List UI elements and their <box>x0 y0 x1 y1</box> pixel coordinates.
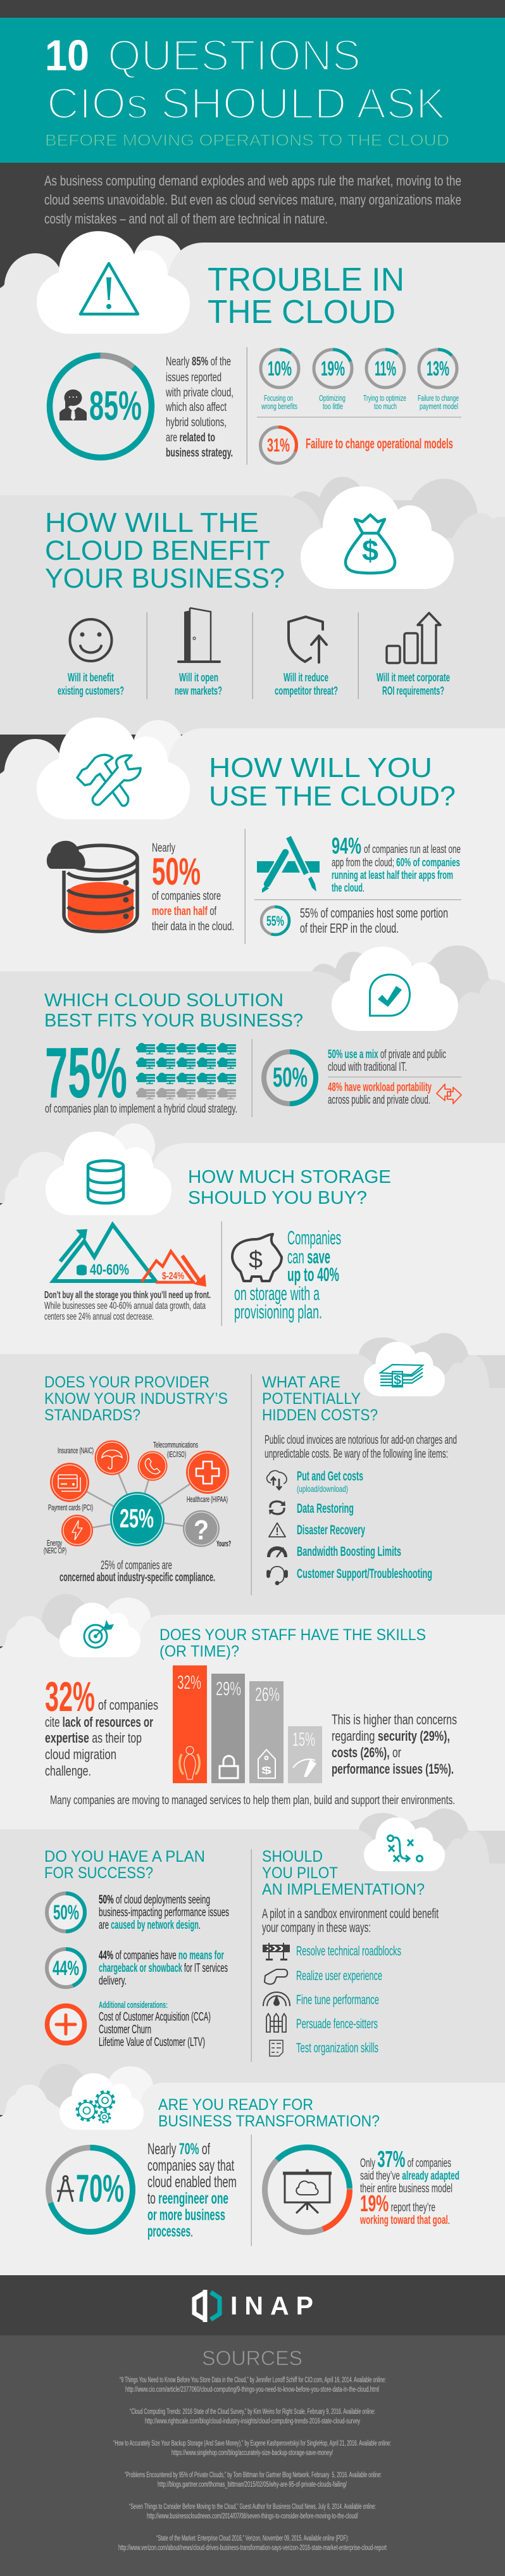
heading: sources: SOURCES <box>202 2347 302 2370</box>
heading: provider standards: KNOW YOUR INDUSTRY’S <box>44 1390 228 1408</box>
small donuts row: Optimizing <box>319 393 346 403</box>
donut: 85% <box>49 356 152 457</box>
text: reengineer processes: to reengineer one <box>147 2190 228 2207</box>
text: reengineer processes: cloud enabled them <box>147 2173 237 2191</box>
donut: 55% ERP: 55% <box>266 913 284 929</box>
icon: price tag <box>258 1750 275 1778</box>
heading: THE CLOUD <box>208 294 396 331</box>
title line one: 10 <box>45 31 89 80</box>
icon: price tag: $ <box>261 1765 271 1776</box>
icon: portability arrows <box>437 1084 461 1104</box>
icon: piggy bank <box>232 1234 282 1281</box>
text: mix and portability <box>328 1048 461 1107</box>
donut: 31% failure: 31% <box>267 435 290 456</box>
small donuts row: 19% <box>321 357 345 380</box>
small donuts row: Focusing on <box>264 393 293 403</box>
text: 85% explanation: which also affect <box>165 401 227 414</box>
icon: restore arrows <box>269 1501 285 1515</box>
text: network design: are caused by network design. <box>99 1919 201 1932</box>
white cloud with tools icon <box>37 717 190 819</box>
heading: BUSINESS TRANSFORMATION? <box>158 2112 380 2130</box>
text: 94% stat: 94% <box>332 833 361 859</box>
text: other concerns: This is higher than concerns <box>332 1712 457 1727</box>
text: bandwidth boosting limits: Bandwidth Boosting Limits <box>297 1544 401 1559</box>
heading: DOES YOUR STAFF HAVE THE SKILLS <box>159 1626 426 1644</box>
heading <box>159 1626 426 1660</box>
text: mix and portability: 48% have workload portability <box>328 1081 432 1094</box>
panel: plan and pilot <box>0 1809 505 2115</box>
donut: 50% mix: 50% <box>273 1062 308 1093</box>
heading: pilot implementation <box>262 1848 425 1898</box>
hub labels: Healthcare (HIPAA) <box>187 1495 228 1504</box>
text: 50% stat <box>152 842 234 933</box>
heading: hidden costs: HIDDEN COSTS? <box>262 1406 378 1424</box>
text: other concerns <box>332 1712 457 1777</box>
text: persuade fence-sitters: Persuade fence-sitters <box>296 2017 378 2031</box>
bar chart: migration concerns: 29% <box>216 1677 241 1700</box>
hub labels: Yours? <box>216 1539 231 1548</box>
text: invoice intro <box>265 1434 457 1461</box>
panel: title banner <box>0 18 505 163</box>
question labels: competitor threat? <box>275 685 338 697</box>
white cloud with money bag icon <box>301 486 454 589</box>
panel: business transformation <box>0 2064 505 2275</box>
heading: YOUR BUSINESS? <box>45 563 285 594</box>
bar chart: migration concerns: 32% <box>177 1671 201 1693</box>
text: network design <box>99 1893 229 1932</box>
text: pilot intro: your company in these ways: <box>262 1921 371 1935</box>
icon: growth bars and arrow <box>387 613 440 663</box>
donut: 70% reengineer <box>48 2148 133 2232</box>
heading: BEST FITS YOUR BUSINESS? <box>44 1011 303 1031</box>
bar chart: migration concerns <box>173 1665 322 1783</box>
small donuts row: 10% <box>268 357 292 380</box>
list: pilot benefits <box>263 1943 401 2056</box>
donut: 55% ERP: of their ERP in the cloud. <box>300 921 399 936</box>
white cloud with check icon <box>332 947 458 1031</box>
icon: energy bolt <box>61 1515 93 1546</box>
text: 85% explanation: with private cloud, <box>165 386 234 400</box>
hub labels: Telecommunications <box>153 1441 198 1449</box>
panel: sources <box>0 2335 505 2576</box>
hub: 25%: 25% <box>120 1503 154 1533</box>
heading: provider standards <box>44 1373 228 1424</box>
icon: smiley <box>70 619 111 661</box>
diagram: industry compliance hub <box>44 1440 231 1555</box>
question labels: existing customers? <box>58 685 124 697</box>
hub: 25% <box>110 1492 165 1546</box>
text: storage advice: While businesses see 40-60% annual data growth, data <box>44 1301 206 1311</box>
source list: “State of the Market: Enterprise Cloud 2016,” Verizon, November 09, 2015. Available online (PDF): <box>156 2535 349 2542</box>
text: 32% lack of resources: expertise as their top <box>45 1730 142 1746</box>
text: adaptation stats: Only 37% of companies <box>360 2146 451 2172</box>
panel: provider standards and hidden costs <box>0 1333 505 1646</box>
heading <box>158 2096 380 2130</box>
icon: upload and download cloud <box>267 1470 287 1489</box>
text: 32% lack of resources <box>45 1673 158 1779</box>
icon: person <box>180 1746 199 1779</box>
heading: CLOUD BENEFIT <box>45 535 270 566</box>
text: 85% explanation: business strategy. <box>166 446 233 460</box>
text: 32% lack of resources: of companies <box>98 1697 158 1713</box>
text: 85% explanation: issues reported <box>166 371 221 384</box>
donut: 50% network design <box>47 1893 85 1931</box>
icon: padlock <box>220 1756 238 1778</box>
chart: growth and cost mountains: 40-60% <box>90 1261 129 1279</box>
icon: checklist <box>270 2040 283 2056</box>
text: 32% lack of resources: cloud migration <box>45 1746 116 1762</box>
text: other concerns: costs (26%), or <box>332 1745 401 1760</box>
heading: pilot implementation: AN IMPLEMENTATION? <box>262 1881 425 1898</box>
white cloud with gears icon <box>59 2073 144 2130</box>
heading: hidden costs: WHAT ARE <box>262 1373 340 1391</box>
text: adaptation stats: their entire business model <box>360 2182 452 2195</box>
text: reengineer processes <box>147 2140 237 2240</box>
text: 50% stat: of companies store <box>152 890 221 903</box>
donut: 44% chargeback <box>47 1949 85 1987</box>
text: additional considerations <box>99 2000 211 2049</box>
icon: fence <box>266 2014 286 2032</box>
white cloud with money bag icon: $ <box>362 534 378 567</box>
heading: provider standards: DOES YOUR PROVIDER <box>44 1373 209 1391</box>
text: chargeback: delivery. <box>99 1974 127 1988</box>
heading <box>209 752 456 812</box>
icon: tuning gauge <box>263 1992 290 2006</box>
icon: roadblock <box>263 1943 290 1960</box>
text: 85% explanation: are related to <box>166 431 215 445</box>
icon: question <box>183 1510 220 1547</box>
source list <box>113 2377 391 2552</box>
text: reengineer processes: or more business <box>147 2206 225 2224</box>
text: test organization skills: Test organization skills <box>296 2041 378 2055</box>
heading: SHOULD YOU BUY? <box>188 1188 367 1208</box>
text: 50% stat: 50% <box>152 850 201 893</box>
title line one: QUESTIONS <box>108 31 361 80</box>
hub labels: (NERC CIP) <box>44 1546 66 1555</box>
hub labels: Payment cards (PCI) <box>48 1503 93 1512</box>
text: 50% stat: more than half of <box>152 905 216 918</box>
white cloud with money icon <box>364 1342 445 1396</box>
heading <box>45 507 285 594</box>
chart: growth and cost mountains <box>53 1225 206 1287</box>
heading: hidden costs <box>262 1373 378 1424</box>
text: reengineer processes: processes. <box>147 2223 193 2240</box>
panel: how much storage <box>0 1123 505 1393</box>
heading: WHICH CLOUD SOLUTION <box>44 990 284 1011</box>
text: 32% lack of resources: challenge. <box>45 1763 91 1779</box>
icon: bandwidth gauge <box>267 1546 287 1557</box>
small donuts row: 13% <box>427 357 449 380</box>
text: mix and portability: across public and private cloud. <box>328 1094 430 1107</box>
question labels: new markets? <box>175 685 222 697</box>
white cloud with target icon <box>59 1603 140 1657</box>
bar chart: migration concerns: 15% <box>292 1728 315 1750</box>
small donuts row: too much <box>374 401 397 411</box>
text: network design: business-impacting performance issues <box>99 1906 229 1919</box>
white cloud with money icon: $ <box>394 1373 401 1387</box>
icon grid: cloud servers <box>136 1043 236 1099</box>
question labels: ROI requirements? <box>382 685 444 697</box>
icon: door <box>177 608 221 663</box>
text: 85% explanation: hybrid solutions, <box>166 416 227 429</box>
small donuts row <box>261 350 459 411</box>
text: storage advice: Don’t buy all the storage you think you’ll need up front. <box>44 1290 211 1301</box>
text: mix and portability: 50% use a mix of private and public <box>328 1048 446 1061</box>
heading: HOW WILL THE <box>45 507 259 538</box>
text: 32% lack of resources: 32% <box>45 1673 95 1720</box>
icon: insurance umbrella <box>95 1440 129 1475</box>
donut: 31% failure <box>261 427 453 464</box>
footer: INAP logo: INAP <box>230 2291 313 2320</box>
question labels: Will it meet corporate <box>377 671 450 684</box>
subtitle: BEFORE MOVING OPERATIONS TO THE CLOUD <box>45 132 449 149</box>
text: compliance caption <box>59 1559 215 1584</box>
donut: 55% ERP <box>261 906 448 936</box>
donut: 44% chargeback: 44% <box>53 1957 79 1979</box>
heading: plan for success: DO YOU HAVE A PLAN <box>44 1848 205 1866</box>
icon: payment card <box>50 1463 89 1502</box>
text: 85% explanation <box>165 355 234 460</box>
small donuts row: payment model <box>420 401 458 411</box>
text: mix and portability: cloud with traditional IT. <box>328 1061 407 1074</box>
text: adaptation stats: 19% report they’re <box>360 2190 435 2216</box>
list: hidden cost items <box>267 1469 432 1584</box>
text: fine tune performance: Fine tune performance <box>296 1993 379 2007</box>
heading: HOW WILL YOU <box>209 752 432 783</box>
text: put and get costs: Put and Get costs <box>297 1469 363 1484</box>
icon: presentation board <box>283 2169 332 2213</box>
heading: hidden costs: POTENTIALLY <box>262 1390 361 1408</box>
icon: headset <box>267 1567 287 1584</box>
icon: pointing hand <box>265 1969 287 1984</box>
text: other concerns: regarding security (29%), <box>332 1728 450 1744</box>
heading: USE THE CLOUD? <box>209 781 456 812</box>
text: 94% stat: app from the cloud; 60% of companies <box>332 856 460 869</box>
text: reengineer processes: companies say that <box>147 2157 234 2175</box>
source list: http://blogs.gartner.com/thomas_bittman/2015/02/05/why-are-95-of-private-clouds-failing/ <box>158 2481 347 2489</box>
text: savings callout: up to 40% <box>287 1263 339 1285</box>
text: compliance caption: concerned about industry-specific compliance. <box>59 1571 215 1584</box>
text: additional considerations: Lifetime Value of Customer (LTV) <box>99 2036 205 2049</box>
icon: app store <box>257 837 320 893</box>
text: savings callout: provisioning plan. <box>234 1301 322 1323</box>
icon: businessman <box>59 389 87 420</box>
text: savings callout <box>234 1227 341 1323</box>
small donuts row: wrong benefits <box>261 401 297 411</box>
icon: piggy bank: $ <box>249 1247 263 1273</box>
donut: 70% reengineer: 70% <box>76 2167 124 2210</box>
text: 50% stat: their data in the cloud. <box>152 920 234 933</box>
text: additional considerations: Customer Churn <box>99 2023 151 2036</box>
donut: 37% and 19% adapted <box>247 2130 367 2250</box>
donut: 50% network design: 50% <box>53 1901 79 1924</box>
text: 94% stat <box>332 833 461 894</box>
text: chargeback <box>99 1949 228 1988</box>
icon: database with cloud <box>47 841 137 931</box>
source list: http://www.rightscale.com/blog/cloud-industry-insights/cloud-computing-trends-2016-state-cloud-survey <box>145 2418 360 2425</box>
text: savings callout: on storage with a <box>234 1282 320 1304</box>
text: compliance caption: 25% of companies are <box>101 1559 172 1572</box>
panel: which cloud solution <box>0 945 505 1203</box>
hub labels <box>44 1441 231 1555</box>
bar chart: migration concerns: 26% <box>255 1683 280 1705</box>
text: 32% lack of resources: cite lack of resources or <box>45 1714 153 1730</box>
text: storage advice <box>44 1290 211 1322</box>
icon: healthcare cross <box>186 1451 229 1494</box>
white cloud with database icon <box>46 1132 171 1215</box>
hub labels: Energy <box>47 1539 62 1548</box>
text: pilot intro <box>262 1907 439 1935</box>
panel: trouble in the cloud <box>0 231 505 570</box>
heading: provider standards: STANDARDS? <box>44 1406 140 1424</box>
footer: INAP logo <box>0 2275 505 2335</box>
heading: HOW MUCH STORAGE <box>188 1167 391 1187</box>
donut: 50% mix <box>264 1052 316 1104</box>
text: hybrid strategy: of companies plan to implement a hybrid cloud strategy. <box>45 1102 237 1116</box>
text: put and get costs <box>297 1469 363 1494</box>
stat: 75%: 75% <box>45 1033 127 1113</box>
heading: pilot implementation: SHOULD <box>262 1848 323 1866</box>
heading <box>208 262 404 331</box>
intro text <box>44 173 461 227</box>
text: realize user experience: Realize user experience <box>296 1969 382 1983</box>
hub labels: (IEC/ISO) <box>167 1450 186 1459</box>
text: 94% stat: the cloud. <box>332 881 365 894</box>
icon: warning <box>269 1523 285 1537</box>
panel: how will the cloud benefit <box>0 477 505 735</box>
chart: growth and cost mountains: $-24% <box>162 1271 184 1282</box>
text: other concerns: performance issues (15%). <box>332 1761 454 1777</box>
white cloud with warning icon <box>37 231 190 334</box>
text: chargeback: 44% of companies have no means for <box>99 1949 224 1962</box>
text: savings callout: Companies <box>287 1227 341 1249</box>
heading <box>44 990 303 1031</box>
question labels: Will it benefit <box>68 671 114 684</box>
small donuts row: too little <box>323 401 343 411</box>
heading: (OR TIME)? <box>159 1643 239 1660</box>
heading: plan for success <box>44 1848 205 1882</box>
heading: TROUBLE IN <box>208 262 404 298</box>
icon: gauge <box>293 1759 316 1777</box>
heading: ARE YOU READY FOR <box>158 2096 313 2114</box>
title line two: CIOs SHOULD ASK <box>47 79 446 128</box>
heading: plan for success: FOR SUCCESS? <box>44 1864 153 1882</box>
small donuts row: 11% <box>375 357 396 380</box>
source list: http://www.cio.com/article/2377060/cloud-computing/9-things-you-need-to-know-before-you-store-data-in-the-cloud.html <box>125 2386 379 2394</box>
source list: https://www.singlehop.com/blog/accurately-size-backup-storage-save-money/ <box>171 2449 334 2457</box>
icon: telecom phone <box>138 1451 167 1481</box>
source list: http://www.businesscloudnews.com/2014/07/08/seven-things-to-consider-before-moving-to-the-cloud/ <box>147 2513 359 2520</box>
text: 85% explanation: Nearly 85% of the <box>166 355 231 369</box>
question labels: Will it open <box>179 671 218 684</box>
question labels: Will it reduce <box>284 671 328 684</box>
icon: question: ? <box>194 1515 209 1546</box>
icon: compass <box>57 2176 74 2202</box>
white cloud with playbook icon <box>364 1817 445 1871</box>
text: network design: 50% of cloud deployments seeing <box>99 1893 210 1907</box>
small donuts row: Trying to optimize <box>363 393 406 403</box>
text: resolve roadblocks: Resolve technical roadblocks <box>296 1944 401 1959</box>
text: data restoring: Data Restoring <box>297 1501 354 1516</box>
question labels <box>58 671 450 697</box>
text: chargeback: chargeback or showback for IT services <box>99 1962 228 1975</box>
text: 50% stat: Nearly <box>152 842 175 855</box>
text: disaster recovery: Disaster Recovery <box>297 1523 365 1537</box>
text: adaptation stats: said they’ve already adapted <box>360 2169 459 2183</box>
small donuts row: Failure to change <box>418 393 459 403</box>
donut: 85%: 85% <box>89 382 142 429</box>
text: adaptation stats: working toward that goal. <box>359 2214 450 2227</box>
icon: shield with arrow <box>289 617 327 662</box>
heading: pilot implementation: YOU PILOT <box>262 1864 338 1882</box>
text: storage advice: centers see 24% annual cost decrease. <box>44 1311 154 1322</box>
text: additional considerations: Cost of Customer Acquisition (CCA) <box>99 2011 211 2024</box>
text: savings callout: can save <box>287 1246 330 1268</box>
heading <box>188 1167 391 1208</box>
text: additional considerations: Additional considerations: <box>99 2000 168 2011</box>
intro text: costly mistakes – and not all of them are technical in nature. <box>44 211 328 227</box>
hub labels: Insurance (NAIC) <box>58 1446 94 1455</box>
panel: staff skills <box>0 1594 505 1874</box>
text: put and get costs: (upload/download) <box>297 1484 348 1494</box>
text: adaptation stats <box>359 2146 459 2227</box>
panel: how will you use the cloud <box>0 717 505 1013</box>
text: reengineer processes: Nearly 70% of <box>147 2140 210 2158</box>
icon: plus ring <box>47 2006 85 2043</box>
